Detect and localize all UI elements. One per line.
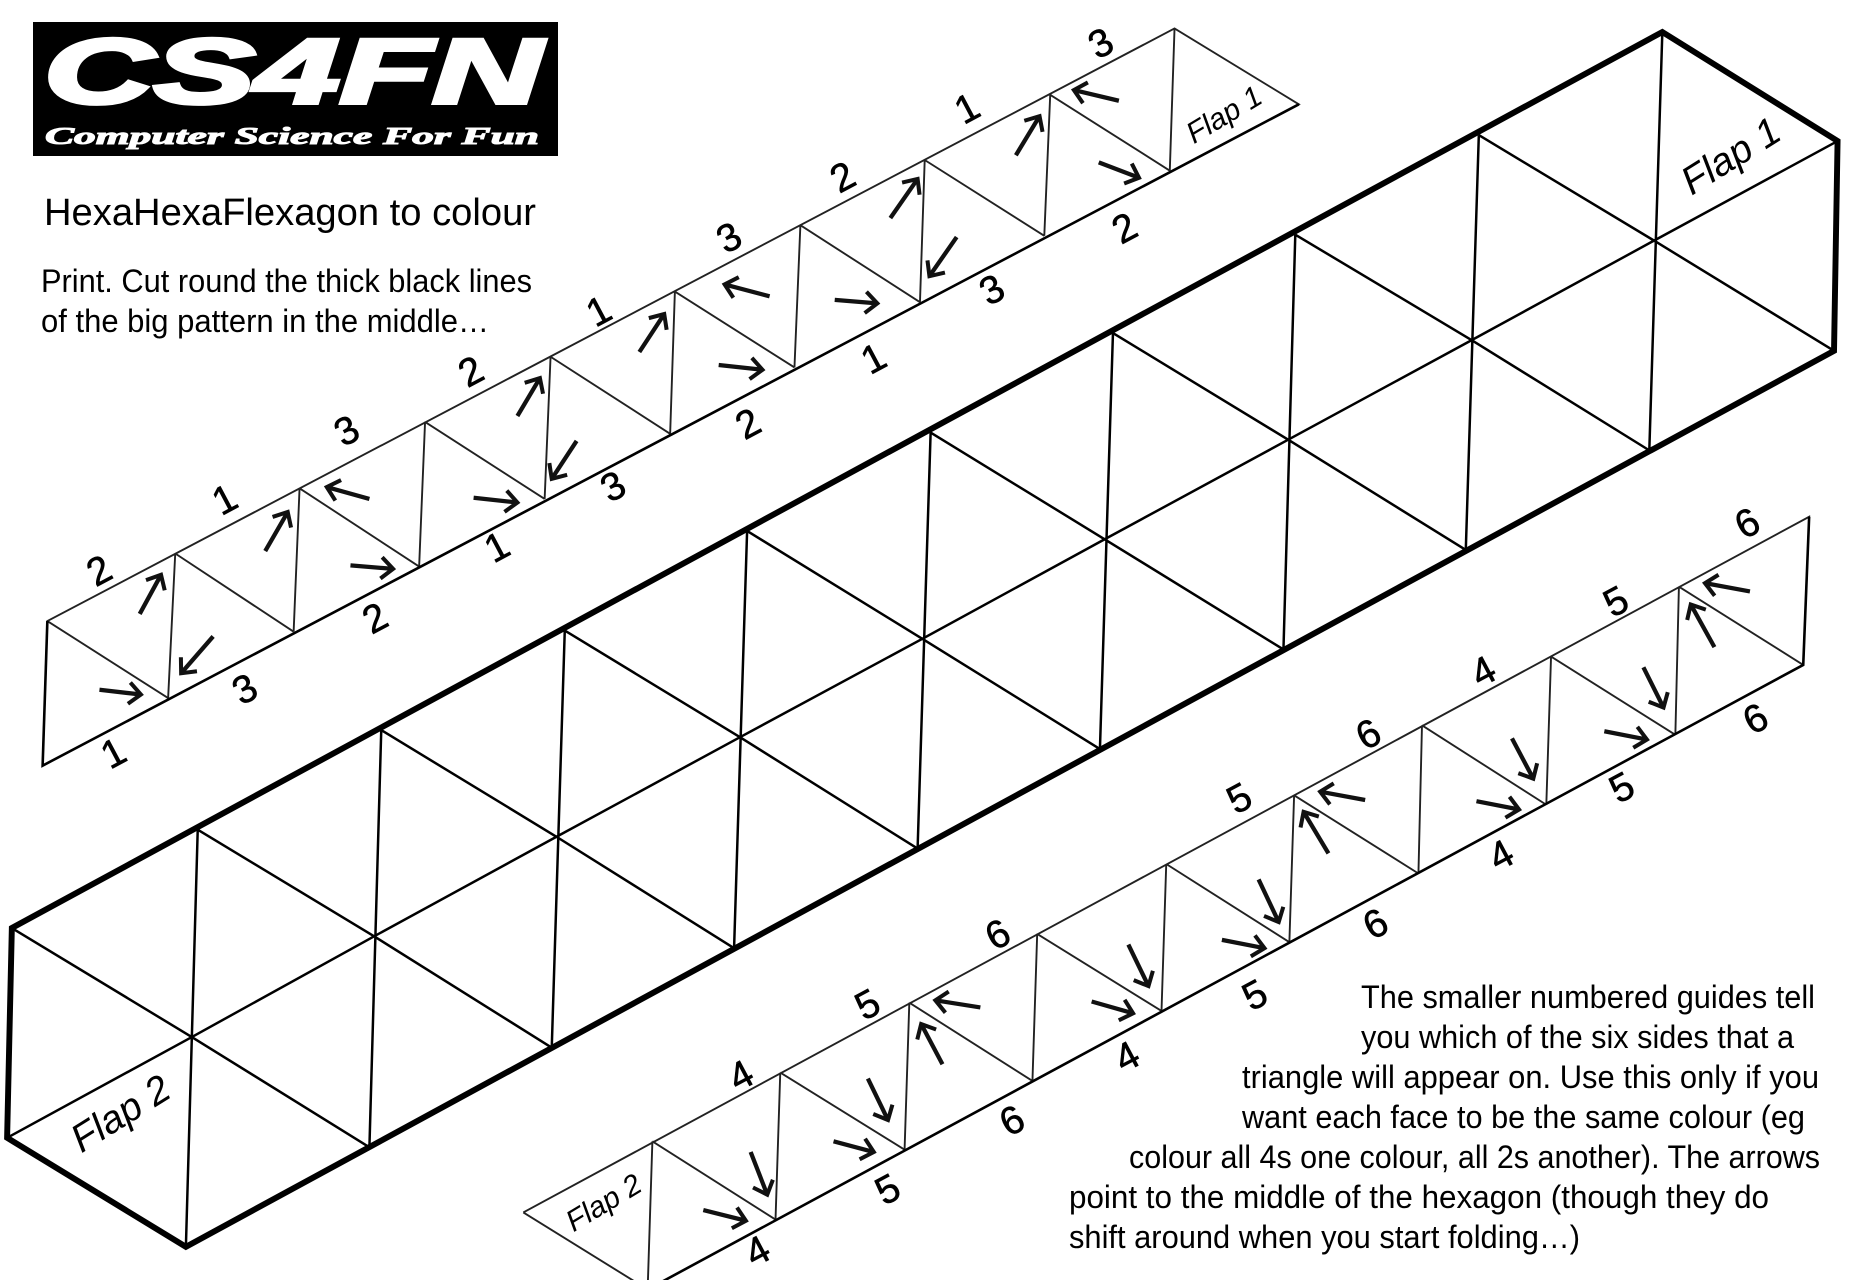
arrow	[1128, 945, 1148, 986]
logo: CS4FN: CS4FN	[44, 21, 546, 123]
intro instructions: of the big pattern in the middle…	[41, 303, 489, 339]
arrow	[1691, 604, 1714, 647]
logo: CS4FN: Computer Science For Fun	[45, 124, 539, 150]
top edge numbers: 4	[1464, 648, 1503, 696]
arrow	[327, 487, 369, 499]
arrow	[350, 565, 393, 569]
bottom edge numbers: 4	[738, 1227, 777, 1276]
strip lines	[523, 517, 1809, 1280]
explanatory note: The smaller numbered guides tell	[1361, 979, 1815, 1015]
arrow	[921, 1024, 942, 1064]
bottom edge numbers: 4	[1107, 1033, 1147, 1081]
arrow	[1512, 738, 1533, 779]
bottom edge numbers: 2	[356, 595, 395, 643]
bottom edge numbers: 5	[1235, 971, 1275, 1020]
arrow	[929, 237, 957, 276]
explanatory note: you which of the six sides that a	[1361, 1019, 1794, 1055]
arrow	[1259, 879, 1279, 922]
heavier bottom edge	[648, 517, 1809, 1280]
bottom edge numbers: 1	[478, 523, 517, 572]
strip lines	[43, 28, 1299, 766]
arrow	[1304, 812, 1328, 853]
arrow	[890, 179, 918, 218]
flap 1 label: Flap 1	[1674, 109, 1788, 203]
intro instructions	[41, 263, 532, 339]
arrow	[1092, 1001, 1133, 1013]
bottom edge numbers: 2	[1105, 205, 1144, 253]
top edge numbers: 2	[452, 348, 491, 396]
top edge numbers: 6	[1349, 711, 1388, 759]
panel: guide strip sides 4 5 6	[523, 500, 1809, 1280]
arrow	[719, 365, 762, 370]
arrow	[1643, 667, 1664, 708]
bottom edge numbers	[738, 695, 1776, 1276]
arrow	[181, 636, 213, 673]
small flap 1 label: Flap 1	[1181, 80, 1268, 150]
flap 2 label: Flap 2	[63, 1067, 178, 1161]
explanatory note: shift around when you start folding…)	[1069, 1219, 1580, 1255]
bottom edge numbers: 5	[868, 1166, 908, 1214]
intro instructions: Print. Cut round the thick black lines	[41, 263, 532, 299]
arrow	[639, 314, 664, 352]
arrow	[265, 512, 288, 551]
bottom edge numbers: 4	[1482, 832, 1521, 880]
top edge numbers	[722, 500, 1767, 1100]
bottom edge numbers: 6	[1736, 695, 1776, 744]
bottom edge numbers: 1	[854, 335, 893, 383]
arrow	[1074, 90, 1119, 101]
arrow	[1099, 162, 1139, 178]
arrow	[725, 284, 770, 296]
top edge numbers: 1	[579, 288, 619, 336]
top edge numbers: 5	[1220, 775, 1259, 823]
arrow	[1320, 792, 1365, 800]
bottom edge numbers: 3	[973, 266, 1012, 314]
top edge numbers: 2	[80, 547, 119, 595]
bottom edge numbers: 3	[225, 666, 265, 714]
arrow	[703, 1210, 746, 1221]
bottom edge numbers: 6	[1356, 900, 1395, 949]
top edge numbers: 3	[1081, 20, 1121, 68]
arrow	[1604, 731, 1647, 740]
arrow	[1705, 583, 1750, 591]
arrow	[140, 575, 161, 614]
arrow	[751, 1152, 767, 1195]
arrow	[868, 1079, 888, 1120]
arrow	[1476, 801, 1519, 809]
top edge numbers: 2	[823, 154, 863, 202]
top edge numbers: 5	[1596, 578, 1636, 626]
bottom edge numbers: 6	[993, 1097, 1032, 1145]
top edge numbers	[80, 20, 1121, 595]
explanatory note	[1069, 979, 1820, 1255]
top edge numbers: 6	[1728, 500, 1767, 548]
top edge numbers: 3	[327, 407, 367, 456]
arrow	[835, 300, 877, 303]
arrow	[1016, 116, 1040, 155]
explanatory note: want each face to be the same colour (eg	[1241, 1099, 1805, 1135]
logo: CS4FN	[33, 21, 558, 156]
heavier bottom edge	[43, 104, 1299, 766]
top edge numbers: 3	[710, 214, 749, 262]
top edge numbers: 1	[948, 85, 987, 133]
explanatory note: point to the middle of the hexagon (though they do	[1069, 1179, 1769, 1215]
bottom edge numbers: 5	[1602, 764, 1642, 812]
arrow	[99, 690, 141, 695]
bottom edge numbers: 2	[729, 400, 768, 448]
arrow	[517, 378, 540, 416]
bottom edge numbers: 1	[94, 730, 133, 778]
arrow	[552, 441, 577, 479]
arrow	[834, 1141, 874, 1152]
arrow	[474, 498, 517, 503]
arrow	[1222, 940, 1265, 948]
bottom edge numbers: 3	[594, 463, 633, 511]
small flap 2 label: Flap 2	[560, 1167, 648, 1238]
top edge numbers: 6	[978, 911, 1018, 959]
top edge numbers: 5	[848, 981, 888, 1029]
title: HexaHexaFlexagon to colour	[44, 192, 536, 234]
explanatory note: colour all 4s one colour, all 2s another). The arrows	[1129, 1139, 1820, 1175]
arrow	[935, 1000, 980, 1007]
explanatory note: triangle will appear on. Use this only if you	[1242, 1059, 1819, 1095]
top edge numbers: 1	[205, 476, 245, 524]
bottom edge numbers	[94, 205, 1144, 778]
top edge numbers: 4	[722, 1052, 761, 1100]
panel: guide strip sides 1 2 3	[43, 20, 1299, 778]
